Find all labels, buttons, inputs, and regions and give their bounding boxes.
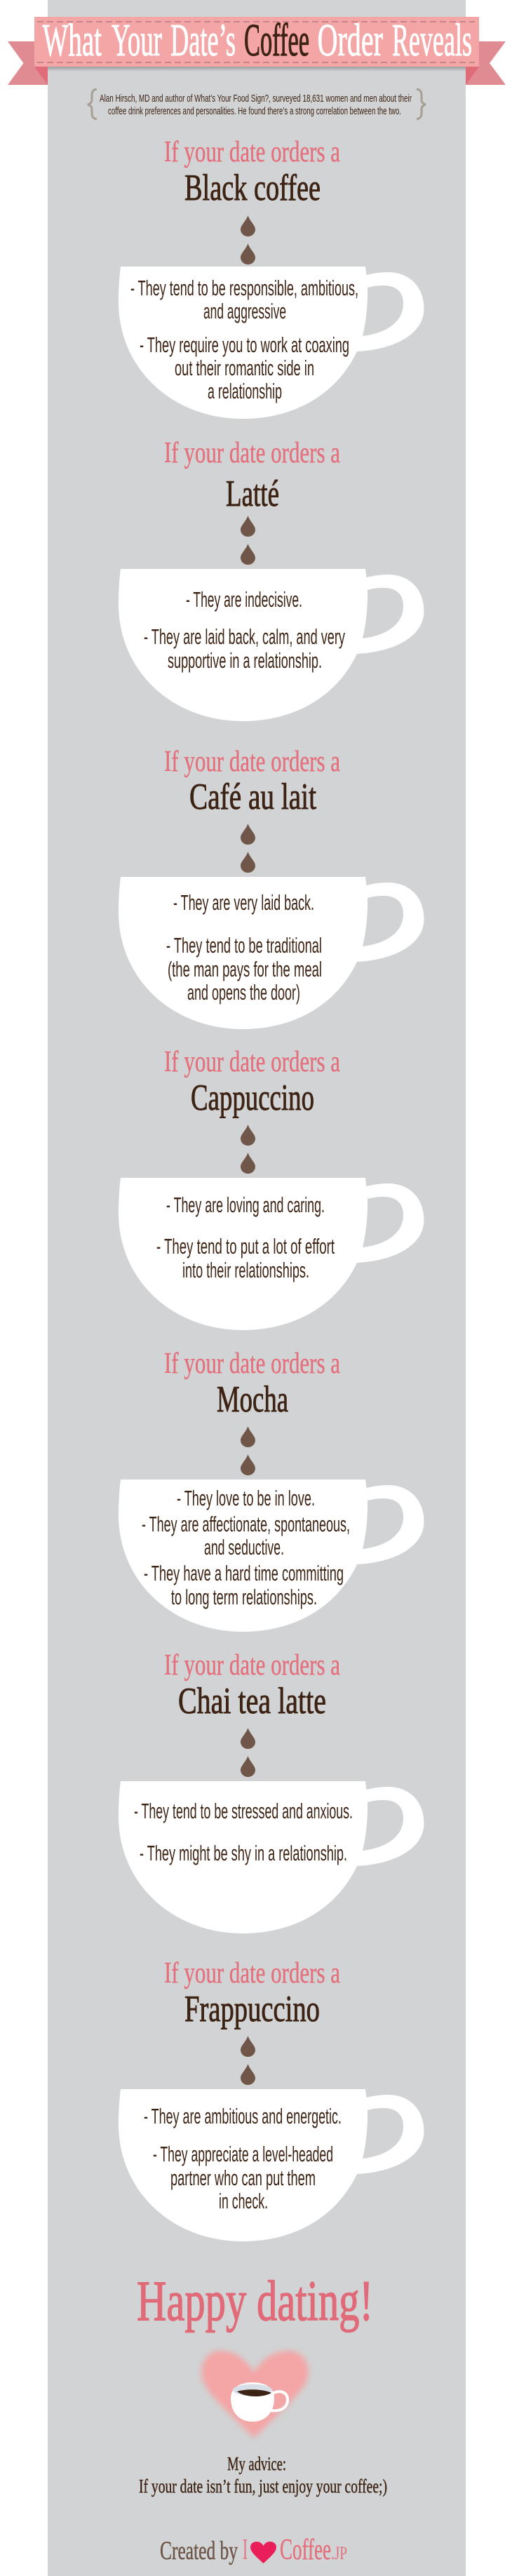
- text: traits: - They might be shy in a relationship.: [140, 1841, 347, 1865]
- text: traits: - They are laid back, calm, and very: [144, 624, 345, 649]
- icon: small coffee cup: [231, 2382, 288, 2422]
- icon: cup: [119, 1480, 424, 1632]
- text: advice: If your date isn’t fun, just enjoy your coffee;): [139, 2476, 387, 2497]
- icon: pink heart: [250, 2542, 276, 2563]
- text: traits: [130, 276, 358, 403]
- credit line: [160, 2534, 347, 2566]
- text: traits: partner who can put them: [170, 2166, 316, 2190]
- title banner: Date’s: [170, 15, 236, 66]
- text: advice: My advice:: [227, 2453, 286, 2474]
- text: traits: - They tend to be traditional: [166, 933, 322, 958]
- title banner: [8, 15, 506, 85]
- text: traits: and aggressive: [203, 299, 286, 323]
- text: traits: - They appreciate a level-headed: [153, 2142, 333, 2166]
- icon: drops: [241, 1426, 255, 1475]
- text: traits: to long term relationships.: [171, 1585, 317, 1609]
- text: traits: - They are affectionate, spontaneous,: [142, 1512, 350, 1536]
- text: traits: [166, 890, 322, 1005]
- icon: cup: [119, 2089, 424, 2241]
- text: traits: in check.: [219, 2189, 268, 2213]
- heading: if your date orders a: If your date orders a: [164, 1348, 340, 1380]
- section: mocha: [119, 1348, 424, 1632]
- text: traits: [134, 1799, 353, 1865]
- credit line: .JP: [331, 2543, 347, 2563]
- text: traits: - They require you to work at coaxing: [140, 333, 349, 357]
- text: traits: supportive in a relationship.: [168, 648, 322, 673]
- heading: if your date orders a: If your date orders a: [164, 1957, 340, 1990]
- text: traits: [144, 587, 345, 673]
- icon: drops: [241, 215, 255, 264]
- section: chai tea latte: [119, 1649, 424, 1933]
- heading: drink name: Black coffee: [184, 168, 321, 208]
- section: cafe au lait: [119, 746, 424, 1029]
- text: traits: [144, 2104, 342, 2213]
- heading: if your date orders a: If your date orders a: [164, 437, 340, 469]
- icon: drops: [241, 516, 255, 565]
- section: frappuccino: [119, 1957, 424, 2241]
- section: cappuccino: [119, 1046, 424, 1330]
- icon: cup: [119, 877, 424, 1029]
- text: traits: - They tend to be responsible, ambitious,: [130, 276, 358, 300]
- section: black coffee: [119, 136, 424, 419]
- text: traits: - They are indecisive.: [186, 587, 302, 612]
- heading: if your date orders a: If your date orders a: [164, 746, 340, 778]
- text: traits: - They tend to put a lot of effort: [156, 1234, 335, 1259]
- text: traits: and opens the door): [187, 980, 300, 1005]
- heading: if your date orders a: If your date orders a: [164, 1649, 340, 1682]
- title banner: What: [42, 15, 102, 66]
- credit line: Coffee: [280, 2534, 331, 2566]
- heading: if your date orders a: If your date orders a: [164, 136, 340, 168]
- icon: cup: [119, 267, 424, 419]
- heading: drink name: Latté: [226, 474, 279, 514]
- text: traits: (the man pays for the meal: [168, 957, 322, 981]
- heading: drink name: Chai tea latte: [178, 1681, 326, 1722]
- title banner: Your: [112, 15, 162, 66]
- heading: drink name: Café au lait: [189, 777, 316, 817]
- icon: drops: [241, 1125, 255, 1174]
- icon: cup: [119, 1781, 424, 1933]
- text: traits: [142, 1486, 350, 1609]
- text: traits: - They love to be in love.: [177, 1486, 315, 1510]
- icon: drops: [241, 2036, 255, 2085]
- icon: cup: [119, 569, 424, 721]
- heading: drink name: Mocha: [217, 1379, 288, 1420]
- credit line: Created by: [160, 2537, 238, 2565]
- icon: drops: [241, 824, 255, 873]
- intro text with braces: [88, 89, 426, 119]
- title banner: Order: [317, 15, 383, 66]
- heading: if your date orders a: If your date orders a: [164, 1046, 340, 1078]
- text: traits: - They tend to be stressed and anxious.: [134, 1799, 353, 1823]
- icon: drops: [241, 1728, 255, 1777]
- text: traits: into their relationships.: [182, 1258, 309, 1282]
- text: traits: and seductive.: [204, 1535, 284, 1559]
- icon: blurred heart: [201, 2351, 309, 2438]
- heading: drink name: Cappuccino: [191, 1078, 314, 1118]
- heading: happy dating: Happy dating!: [137, 2269, 373, 2333]
- icon: cup: [119, 1178, 424, 1330]
- credit line: I: [243, 2534, 248, 2566]
- text: traits: - They are loving and caring.: [166, 1193, 325, 1217]
- text: traits: - They are very laid back.: [173, 890, 314, 915]
- text: traits: out their romantic side in: [175, 356, 314, 380]
- text: traits: - They have a hard time committing: [144, 1561, 344, 1585]
- text: traits: - They are ambitious and energetic.: [144, 2104, 342, 2128]
- text: traits: a relationship: [208, 379, 282, 403]
- heading: drink name: Frappuccino: [184, 1989, 320, 2030]
- text: advice: [139, 2453, 387, 2497]
- section: latte: [119, 437, 424, 721]
- title banner: Coffee: [244, 15, 309, 66]
- text: traits: [156, 1193, 335, 1282]
